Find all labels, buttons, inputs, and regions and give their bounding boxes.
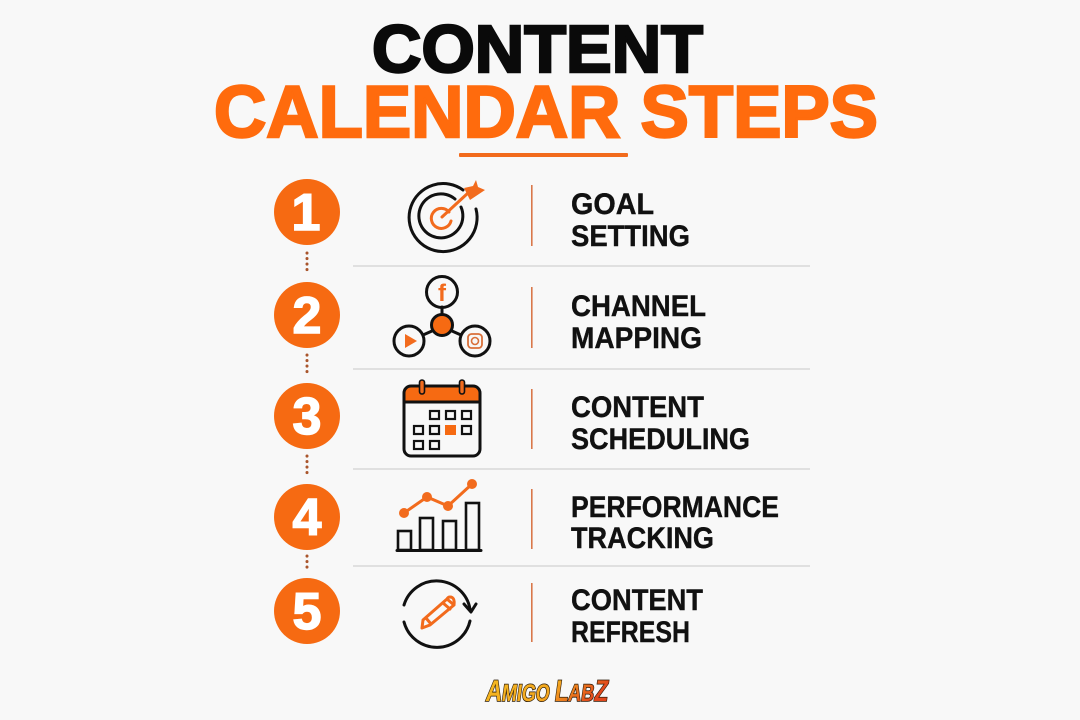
label: content refresh: REFRESH	[571, 616, 690, 649]
step 3 number: 3	[293, 388, 321, 446]
icon: performance chart	[397, 479, 481, 550]
step 4 number	[274, 484, 340, 550]
icon: channel network: f	[438, 280, 447, 307]
label: performance tracking: PERFORMANCE	[571, 491, 779, 524]
vertical separators	[531, 185, 533, 642]
label: goal setting	[571, 188, 690, 253]
label: content scheduling: SCHEDULING	[571, 423, 750, 456]
step 5 number: 5	[293, 583, 321, 641]
row dividers	[353, 265, 810, 567]
step 1 number	[274, 179, 340, 245]
step 1 number: 1	[292, 184, 320, 242]
title: CONTENT	[372, 12, 703, 87]
label: content scheduling: CONTENT	[571, 391, 704, 424]
step 4 number: 4	[293, 489, 322, 547]
dotted connectors	[306, 253, 308, 572]
title	[214, 12, 878, 153]
logo: Amigo LabZ: AMIGO LABZ	[484, 675, 611, 708]
step 5 number	[274, 578, 340, 644]
icon: calendar	[404, 380, 480, 456]
label: channel mapping: MAPPING	[571, 322, 702, 355]
label: goal setting: SETTING	[571, 220, 690, 253]
label: performance tracking: TRACKING	[571, 522, 714, 555]
label: content scheduling	[571, 391, 750, 456]
step 2 number	[274, 282, 340, 348]
step 3 number	[274, 383, 340, 449]
label: channel mapping: CHANNEL	[571, 290, 706, 323]
icon: target	[409, 180, 485, 252]
label: content refresh: CONTENT	[571, 584, 703, 617]
icon: refresh pencil	[404, 581, 476, 647]
step 2 number: 2	[293, 287, 321, 345]
icon: channel network	[394, 276, 490, 356]
label: content refresh	[571, 584, 703, 649]
title: CALENDAR STEPS	[214, 72, 878, 153]
label: performance tracking	[571, 491, 779, 555]
title underline	[459, 153, 628, 157]
label: goal setting: GOAL	[571, 188, 654, 221]
label: channel mapping	[571, 290, 706, 355]
